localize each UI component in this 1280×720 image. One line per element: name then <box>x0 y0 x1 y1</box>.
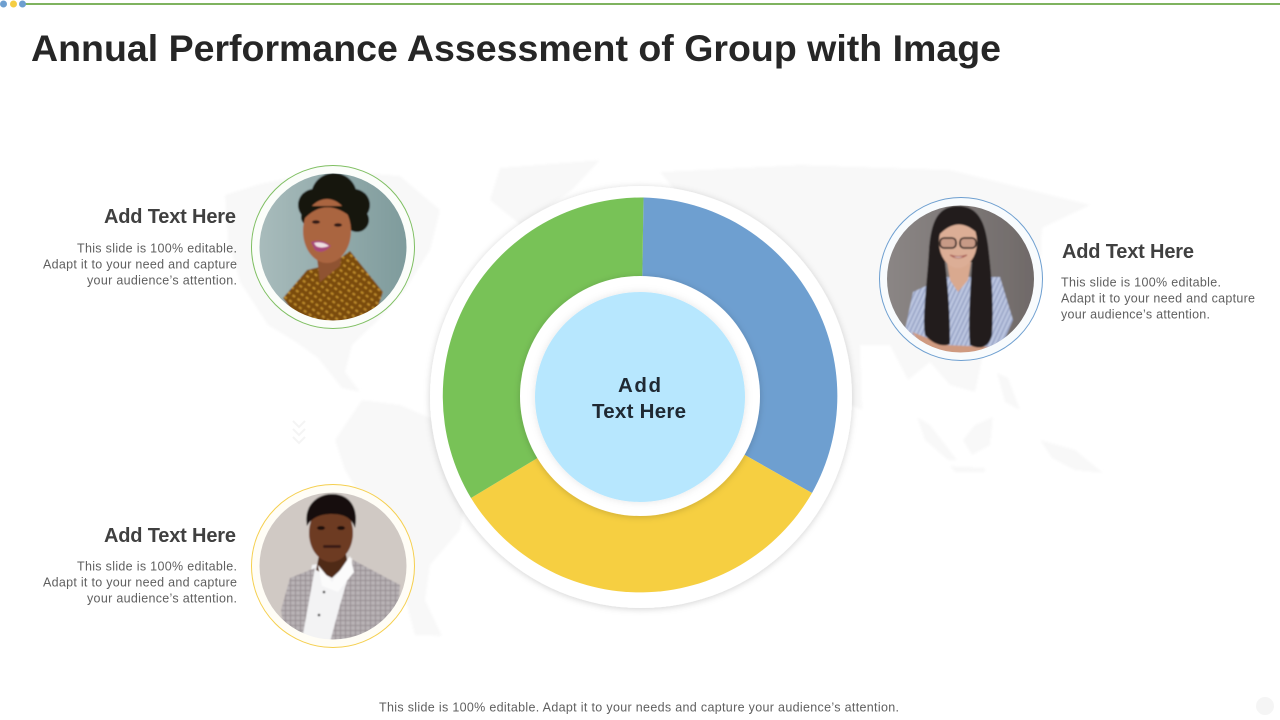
text block: bottom left <box>43 525 237 606</box>
text block: right: Adapt it to your need and capture <box>1061 292 1255 306</box>
text block: bottom left: This slide is 100% editable. <box>77 560 237 574</box>
segment: yellow <box>471 396 812 592</box>
text block: right: your audience’s attention. <box>1061 308 1210 322</box>
text block: right: Add Text Here <box>1062 241 1194 263</box>
footer note: This slide is 100% editable. Adapt it to your needs and capture your audience’s attention. <box>379 700 899 714</box>
centre label: Add <box>618 374 661 397</box>
inner white ring <box>520 276 760 516</box>
segment: green <box>443 197 644 498</box>
text block: right: This slide is 100% editable. <box>1061 276 1221 290</box>
text block: bottom left: your audience’s attention. <box>87 592 237 606</box>
outer white ring <box>430 186 852 608</box>
faint chevrons <box>293 421 305 443</box>
header accent line with dots <box>0 0 1280 8</box>
portrait: woman top left <box>252 166 414 328</box>
text block: right <box>1061 241 1255 322</box>
text block: top left: Add Text Here <box>104 206 236 228</box>
centre label: Text Here <box>592 400 686 423</box>
segment: blue <box>640 198 837 493</box>
text block: bottom left: Adapt it to your need and capture <box>43 576 237 590</box>
text block: top left: This slide is 100% editable. <box>77 242 237 256</box>
title: Annual Performance Assessment of Group with Image <box>31 27 1001 69</box>
text block: bottom left: Add Text Here <box>104 525 236 547</box>
centre label <box>592 374 686 423</box>
portrait: woman top right <box>880 198 1042 360</box>
text block: top left: Adapt it to your need and capture <box>43 258 237 272</box>
text block: top left: your audience’s attention. <box>87 274 237 288</box>
portrait: man bottom left <box>252 484 414 648</box>
donut chart <box>430 186 852 608</box>
page marker circle <box>1256 697 1274 715</box>
text block: top left <box>43 206 237 288</box>
centre circle <box>535 292 745 502</box>
world map background <box>225 160 1103 636</box>
